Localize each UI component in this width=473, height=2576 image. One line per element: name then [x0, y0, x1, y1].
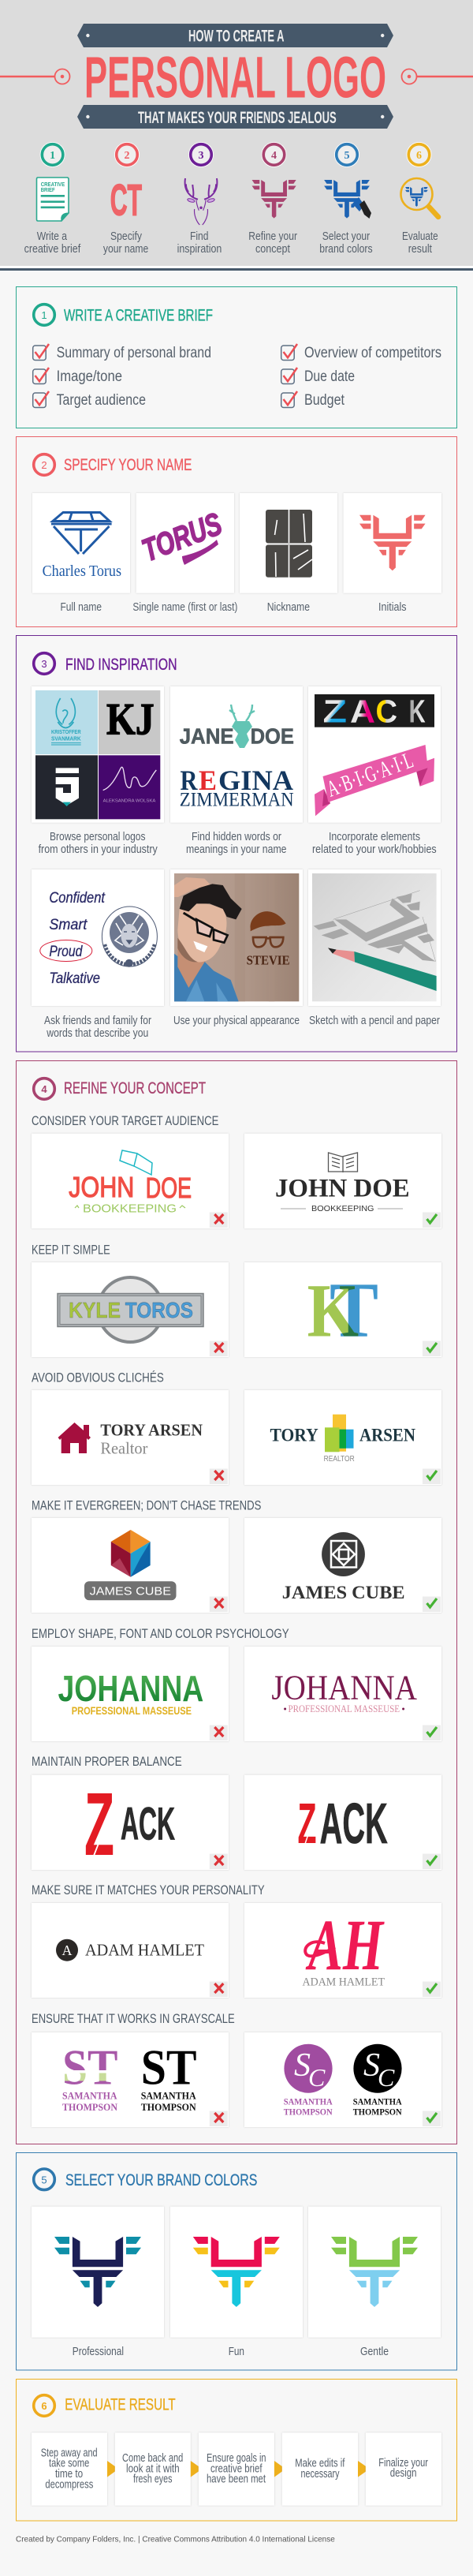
step 3 overview: inspiration: [177, 243, 222, 256]
logo: Abigail ribbon: A·B·I·G·A·I·L: [323, 748, 417, 802]
step 5 overview: brand colors: [319, 243, 373, 256]
step card: decompress: Step away and: [41, 2447, 98, 2459]
bad logo: playful John Doe: DOE: [146, 1172, 192, 1204]
logo grid: [35, 690, 160, 819]
logo: Abigail ribbon: [315, 745, 434, 816]
card: gentle palette: Gentle: [360, 2346, 389, 2358]
panel: select your brand colors: [16, 2152, 457, 2370]
panel: evaluate result: [16, 2380, 457, 2521]
card: professional palette: [32, 2207, 164, 2358]
card: nickname: Nickname: [267, 601, 310, 614]
logo: Regina Zimmerman: ZIMMERMAN: [180, 790, 294, 811]
icon: deer: [185, 178, 217, 225]
good logo: KT monogram: [244, 1262, 441, 1357]
bad logo: striped ST: [32, 2032, 229, 2127]
step card: finalize: [366, 2432, 441, 2506]
step 1 overview: [24, 142, 81, 256]
right title ornament: [402, 69, 473, 84]
card: hidden meanings: meanings in your name: [186, 843, 287, 856]
card: personal logo examples: [32, 686, 164, 856]
heading: EVALUATE RESULT: [65, 2395, 176, 2413]
row: works in grayscale: ENSURE THAT IT WORKS IN GRAYSCALE: [32, 2011, 235, 2026]
step 3 overview: Find: [190, 230, 208, 243]
step 5 overview: 5: [344, 150, 350, 162]
good logo: Johanna serif: PROFESSIONAL MASSEUSE: [289, 1703, 400, 1714]
section 4 number: [34, 1079, 54, 1099]
bad logo: James Cube gem: JAMES CUBE: [90, 1585, 171, 1598]
panel: specify your name: [16, 437, 457, 626]
photo: man with glasses: [174, 873, 299, 1001]
checklist: Target audience: [57, 392, 146, 409]
row: consider your target audience: CONSIDER YOUR TARGET AUDIENCE: [32, 1113, 218, 1128]
good logo: script circles: C: [378, 2063, 395, 2092]
row: matches your personality: [32, 1882, 441, 1998]
step card: ensure goals: creative brief: [210, 2462, 263, 2475]
row: avoid obvious cliches: [32, 1370, 441, 1485]
logo: Jane Doe: DOE: [251, 724, 294, 749]
panel: refine your concept: [16, 1060, 457, 2144]
good logo: classic John Doe: JOHN DOE: [275, 1175, 410, 1203]
logo: Zack: K: [409, 694, 426, 730]
logo grid: ALEKSANDRA WOLSKA: [103, 799, 156, 804]
bad logo: Kyle Toros badge: [32, 1262, 229, 1357]
icon: CT initials: CT: [110, 175, 142, 225]
good logo: script circles: SAMANTHA: [284, 2096, 333, 2107]
step card: make edits: necessary: [301, 2468, 340, 2481]
heading: WRITE A CREATIVE BRIEF: [64, 307, 213, 325]
logo grid: SVANMARK: [51, 736, 81, 742]
good logo: James Cube mark: [244, 1518, 441, 1613]
bad logo: playful John Doe: [32, 1134, 229, 1228]
good logo: balanced Zack: [244, 1775, 441, 1870]
photo: man with glasses: STEVIE: [247, 953, 290, 968]
section 6 number: [34, 2395, 54, 2416]
card: full name: Full name: [60, 601, 102, 614]
bad logo: striped ST: ST: [62, 2040, 118, 2096]
bad logo: Kyle Toros badge: TOROS: [125, 1298, 193, 1322]
step card: ensure goals: Ensure goals in: [207, 2452, 266, 2465]
checklist: Budget: [304, 392, 345, 409]
good logo: James Cube mark: JAMES CUBE: [282, 1583, 405, 1603]
card: fun palette: Fun: [229, 2346, 244, 2358]
bad logo: playful John Doe: BOOKKEEPING: [83, 1202, 177, 1216]
card: hidden meanings: Find hidden words or: [192, 831, 281, 843]
card: personal logo examples: Browse personal logos: [50, 831, 145, 843]
card: initials: Initials: [378, 601, 407, 614]
step card: make edits: Make edits if: [295, 2458, 345, 2470]
logo: CH AZ blocks: [266, 510, 312, 578]
heading: FIND INSPIRATION: [65, 656, 177, 674]
bad logo: striped ST: SAMANTHA: [141, 2091, 196, 2102]
step 5 overview: Select your: [322, 230, 370, 243]
logo: Regina Zimmerman: E: [199, 765, 217, 796]
good logo: script circles: [244, 2032, 441, 2127]
icon: magnifier: [400, 178, 438, 217]
card: initials: [344, 493, 441, 614]
word list: [40, 890, 106, 987]
top banner: HOW TO CREATE A: [188, 28, 284, 46]
good logo: Tory Arsen blocks: [244, 1390, 441, 1485]
row: make it evergreen: [32, 1497, 441, 1613]
card: work and hobbies: Incorporate elements: [329, 831, 420, 843]
logo: Jane Doe: JANE: [180, 724, 234, 749]
card: nickname: [240, 493, 337, 614]
step 6 overview: 6: [416, 150, 422, 162]
row: keep it simple: [32, 1242, 441, 1357]
logo: Regina Zimmerman: GINA: [218, 765, 293, 796]
card: words from friends: [32, 869, 164, 1040]
card: words from friends: Ask friends and family for: [44, 1015, 151, 1027]
row: consider your target audience: [32, 1113, 441, 1228]
good logo: script circles: SAMANTHA: [353, 2096, 402, 2107]
step 4 overview: 4: [271, 150, 277, 162]
card: work and hobbies: [308, 686, 441, 856]
top banner: [77, 24, 393, 47]
step 2 overview: Specify: [110, 230, 143, 243]
good logo: Adam Hamlet script: ADAM HAMLET: [303, 1976, 385, 1989]
good logo: KT monogram: K: [307, 1268, 359, 1352]
arrow: [358, 2461, 370, 2477]
step card: ensure goals: [199, 2432, 274, 2506]
logo: Regina Zimmerman: R: [180, 765, 198, 796]
good logo: Johanna serif: JOHANNA: [271, 1668, 417, 1707]
row: maintain proper balance: [32, 1754, 441, 1874]
section 2 number: 2: [41, 459, 47, 471]
logo grid: KRISTOFFER: [51, 730, 81, 735]
checklist: Summary of personal brand: [57, 345, 211, 361]
logo: Jane Doe: [180, 705, 294, 749]
bad logo: Tory Arsen house: [32, 1390, 229, 1485]
photo: pencil and sketch: [312, 873, 437, 1001]
section 6 number: 6: [41, 2400, 47, 2412]
heading: REFINE YOUR CONCEPT: [64, 1079, 206, 1097]
word list: Talkative: [49, 970, 100, 987]
step 1 overview: Write a: [37, 230, 68, 243]
good logo: script circles: S: [294, 2047, 311, 2084]
step 1 overview: creative brief: [24, 243, 81, 256]
good logo: script circles: S: [363, 2047, 380, 2084]
step card: ensure goals: have been met: [207, 2473, 266, 2486]
step card: make edits: [282, 2432, 358, 2506]
logo: diamond: [51, 513, 112, 554]
logo: Regina Zimmerman: [180, 765, 294, 811]
logo: Torus: TORUS: [137, 507, 227, 568]
good logo: balanced Zack: Z: [298, 1792, 317, 1856]
step card: finalize: Finalize your: [378, 2457, 428, 2469]
step 3 overview: [177, 142, 222, 256]
step 6 overview: Evaluate: [402, 230, 438, 243]
good logo: Johanna serif: [244, 1647, 441, 1741]
bad logo: striped ST: SAMANTHA: [62, 2091, 117, 2102]
good logo: classic John Doe: [244, 1134, 441, 1228]
heading: SELECT YOUR BRAND COLORS: [65, 2171, 257, 2189]
bad logo: unbalanced Zack: [32, 1774, 229, 1874]
good logo: KT monogram: T: [330, 1266, 378, 1353]
bad logo: James Cube gem: [32, 1518, 229, 1613]
icon: creative brief document: BRIEF: [41, 186, 55, 193]
row: shape, font and color psychology: EMPLOY SHAPE, FONT AND COLOR PSYCHOLOGY: [32, 1626, 289, 1641]
checklist: Overview of competitors: [304, 345, 441, 361]
card: work and hobbies: related to your work/hobbies: [312, 843, 437, 856]
bad logo: Johanna green: JOHANNA: [58, 1668, 203, 1709]
section 3 number: 3: [41, 658, 47, 670]
card: single name: [132, 493, 237, 614]
section 5 number: 5: [41, 2174, 47, 2185]
checklist: [33, 344, 441, 409]
step 4 overview: concept: [255, 243, 290, 256]
bad logo: Johanna green: [32, 1647, 229, 1741]
bad logo: striped ST: THOMPSON: [141, 2102, 196, 2113]
row: works in grayscale: [32, 2011, 441, 2127]
step 2 overview: [103, 142, 148, 256]
step 2 overview: your name: [103, 243, 148, 256]
section 1 number: [34, 305, 54, 325]
step card: decompress: time to: [55, 2468, 83, 2481]
bad logo: striped ST: ST: [141, 2040, 197, 2096]
step card: finalize: design: [390, 2467, 416, 2480]
good logo: classic John Doe: BOOKKEEPING: [311, 1204, 374, 1213]
section 1 number: 1: [41, 309, 47, 321]
step 6 overview: [400, 142, 438, 256]
section 3 number: [34, 653, 54, 674]
step 6 overview: result: [408, 243, 432, 256]
row: make it evergreen: MAKE IT EVERGREEN; DON'T CHASE TRENDS: [32, 1497, 261, 1512]
icon: refine logo: [252, 180, 296, 219]
card: pencil sketch: Sketch with a pencil and paper: [309, 1015, 440, 1027]
card: full name: Charles Torus: [43, 563, 121, 580]
icon: logo with paint brush: [324, 180, 371, 219]
card: pencil sketch: [308, 869, 441, 1027]
good logo: script circles: THOMPSON: [284, 2107, 333, 2118]
row: shape, font and color psychology: [32, 1626, 441, 1741]
bad logo: Adam Hamlet formal: ADAM HAMLET: [85, 1941, 204, 1960]
word list: Confident: [49, 890, 106, 907]
subtitle banner: THAT MAKES YOUR FRIENDS JEALOUS: [138, 109, 337, 127]
bad logo: playful John Doe: JOHN: [69, 1171, 134, 1203]
bad logo: Johanna green: PROFESSIONAL MASSEUSE: [72, 1704, 192, 1717]
logo: Zack: Z: [323, 694, 347, 730]
good logo: Adam Hamlet script: [244, 1903, 441, 1998]
bad logo: unbalanced Zack: Z: [84, 1774, 114, 1874]
step card: decompress: decompress: [45, 2478, 93, 2491]
bad logo: Kyle Toros badge: KYLE: [69, 1298, 121, 1322]
bad logo: Adam Hamlet formal: [32, 1903, 229, 1998]
left title ornament: [0, 69, 69, 84]
bad logo: Adam Hamlet formal: A: [61, 1942, 73, 1958]
good logo: script circles: C: [308, 2063, 326, 2092]
step 5 overview: [319, 142, 373, 256]
row: avoid obvious cliches: AVOID OBVIOUS CLICHÉS: [32, 1370, 164, 1385]
section 5 number: [34, 2169, 54, 2190]
word list: Proud: [49, 944, 84, 960]
card: hidden meanings: [170, 686, 303, 856]
logo: Zack: C: [375, 694, 397, 730]
step card: fresh eyes: [115, 2432, 191, 2506]
step 3 overview: 3: [199, 150, 203, 162]
good logo: script circles: THOMPSON: [353, 2107, 402, 2118]
row: keep it simple: KEEP IT SIMPLE: [32, 1242, 110, 1257]
good logo: Adam Hamlet script: AH: [305, 1905, 385, 1985]
row: maintain proper balance: MAINTAIN PROPER BALANCE: [32, 1754, 182, 1769]
bad logo: Tory Arsen house: TORY ARSEN: [100, 1420, 203, 1439]
step card: decompress: take some: [49, 2458, 89, 2470]
step 4 overview: Refine your: [248, 230, 297, 243]
arrow: [274, 2461, 285, 2477]
logo: Torus: [137, 507, 227, 568]
panel: find inspiration: [16, 636, 457, 1052]
icon: creative brief document: [36, 178, 69, 221]
icon: creative brief document: CREATIVE: [41, 181, 65, 188]
card: fun palette: [170, 2207, 303, 2358]
card: full name: [32, 493, 130, 614]
bad logo: striped ST: THOMPSON: [62, 2102, 117, 2113]
card: words from friends: words that describe you: [46, 1027, 148, 1040]
good logo: balanced Zack: ACK: [320, 1792, 388, 1856]
step 4 overview: [248, 142, 297, 256]
logo: Zack: A: [350, 694, 375, 730]
arrow: [191, 2461, 202, 2477]
bad logo: unbalanced Zack: ACK: [121, 1799, 175, 1850]
footer credit: Created by Company Folders, Inc. | Creative Commons Attribution 4.0 International License: [16, 2535, 335, 2544]
good logo: Tory Arsen blocks: REALTOR: [324, 1454, 355, 1464]
checklist: Due date: [304, 368, 355, 385]
step 2 overview: 2: [125, 150, 129, 162]
card: physical appearance: Use your physical appearance: [173, 1015, 300, 1027]
word list: Smart: [49, 917, 88, 933]
section 4 number: 4: [41, 1083, 47, 1095]
logo grid: KJ: [106, 696, 155, 745]
step 1 overview: 1: [50, 150, 55, 162]
step card: fresh eyes: Come back and: [122, 2452, 183, 2465]
heading: SPECIFY YOUR NAME: [64, 456, 192, 474]
logo: initials mark: [359, 515, 426, 570]
arrow: [107, 2461, 118, 2477]
card: professional palette: Professional: [73, 2346, 124, 2358]
icon: lion crest: [102, 907, 157, 967]
row: matches your personality: MAKE SURE IT MATCHES YOUR PERSONALITY: [32, 1882, 265, 1897]
card: personal logo examples: from others in your industry: [39, 843, 158, 856]
bad logo: Tory Arsen house: Realtor: [100, 1439, 147, 1458]
header: [0, 0, 473, 271]
good logo: Tory Arsen blocks: ARSEN: [359, 1426, 415, 1445]
good logo: Tory Arsen blocks: TORY: [270, 1426, 318, 1445]
card: gentle palette: [308, 2207, 441, 2358]
logo: Zack: [315, 694, 434, 730]
subtitle banner: [77, 105, 393, 129]
step card: fresh eyes: fresh eyes: [133, 2473, 172, 2486]
section 2 number: [34, 454, 54, 475]
panel: write a creative brief: [16, 287, 457, 428]
card: single name: Single name (first or last): [132, 601, 237, 614]
checklist: Image/tone: [57, 368, 122, 385]
step card: fresh eyes: look at it with: [126, 2462, 180, 2475]
step card: decompress: [32, 2432, 107, 2506]
card: physical appearance: [170, 869, 303, 1027]
